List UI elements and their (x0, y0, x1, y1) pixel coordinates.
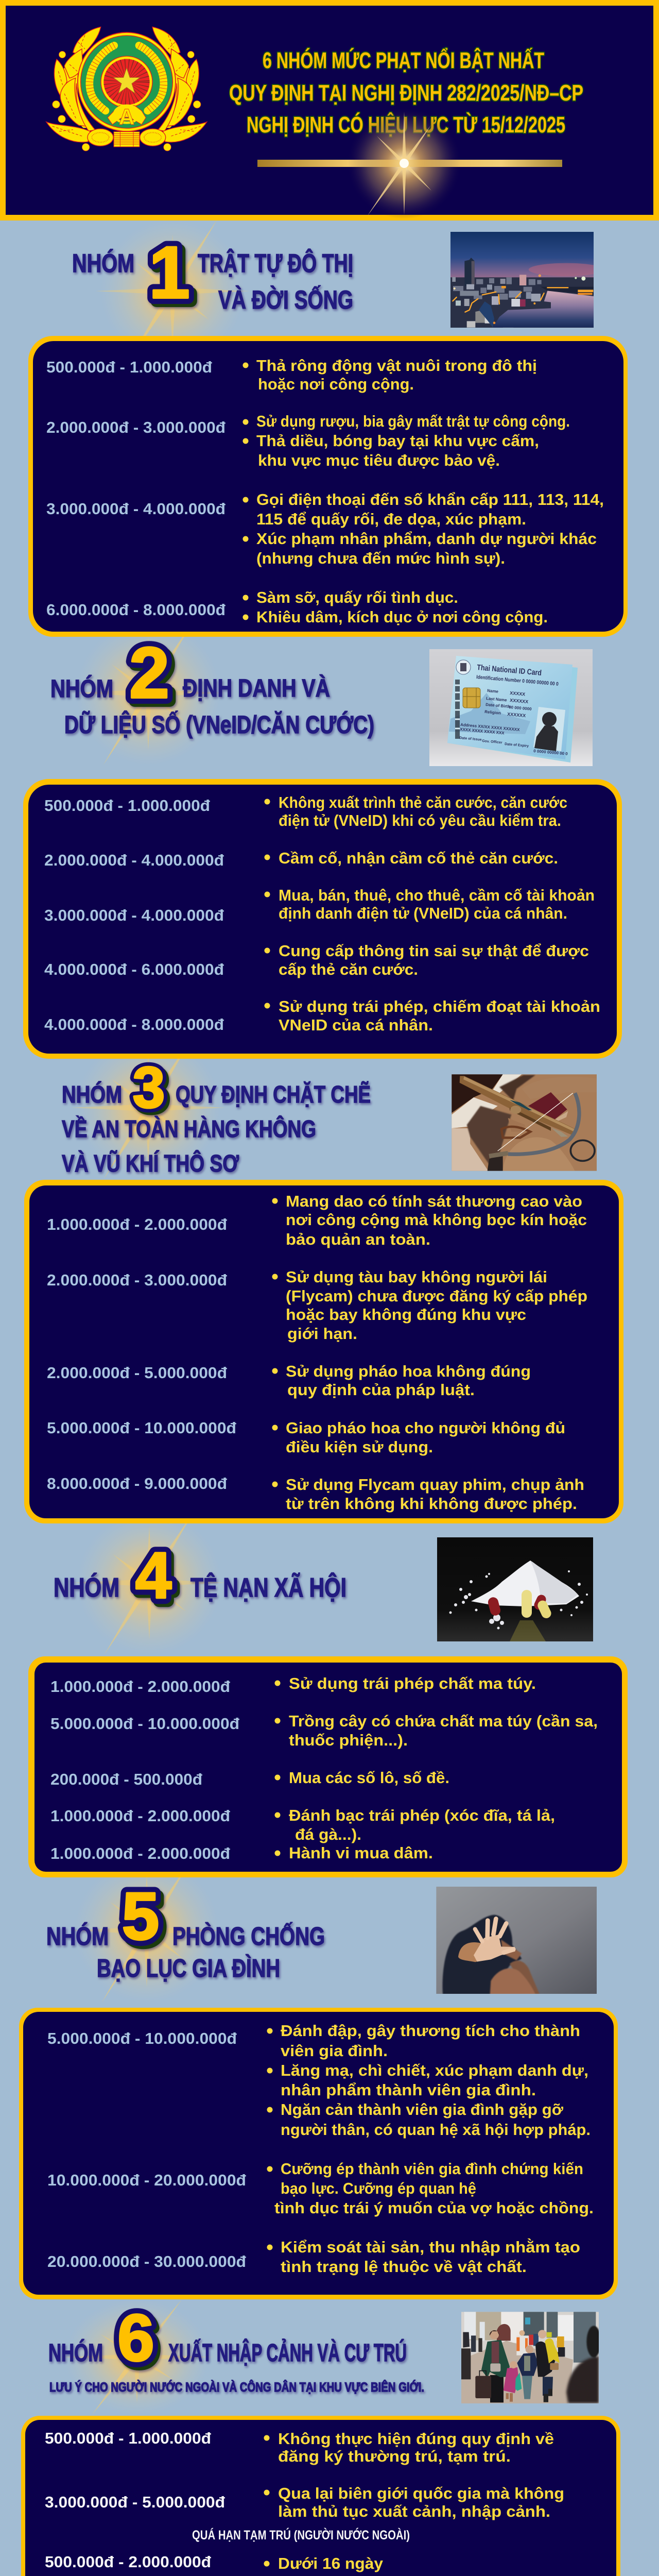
number 5: 5 (122, 1878, 159, 1954)
row: 500.000đ - 2.000.000đ (45, 2553, 384, 2572)
row: 2.000.000đ - 5.000.000đ: Sử dụng pháo hoa không đúng (286, 1362, 531, 1380)
panel frame (28, 336, 628, 637)
row: 500.000đ - 1.000.000đ: đăng ký thường trú, tạm trú. (278, 2447, 511, 2465)
row: 5.000.000đ - 10.000.000đ: Ngăn cản thành viên gia đình gặp gỡ (281, 2100, 564, 2119)
row: 2.000.000đ - 3.000.000đ: 2.000.000đ - 3.000.000đ (47, 1271, 227, 1289)
row: 500.000đ - 2.000.000đ: Dưới 16 ngày (278, 2554, 384, 2572)
section 6 heading: LƯU Ý CHO NGƯỜI NƯỚC NGOÀI VÀ CÔNG DÂN TẠI KHU VỰC BIÊN GIỚI. (49, 2379, 424, 2395)
row: 6.000.000đ - 8.000.000đ: Sàm sỡ, quấy rối tình dục. (256, 588, 458, 606)
row: 500.000đ - 1.000.000đ: 500.000đ - 1.000.000đ (44, 796, 210, 815)
row: 500.000đ - 1.000.000đ (46, 357, 537, 393)
panel frame (28, 1656, 628, 1877)
number 2: 2 (129, 632, 169, 713)
row: 6.000.000đ - 8.000.000đ: 6.000.000đ - 8.000.000đ (46, 601, 226, 619)
row: 5.000.000đ - 10.000.000đ: người thân, có quan hệ xã hội hợp pháp. (281, 2121, 591, 2139)
panel: group 1 fines (28, 336, 628, 637)
row: 10.000.000đ - 20.000.000đ: tình dục trái ý muốn của vợ hoặc chồng. (274, 2199, 594, 2217)
row: 3.000.000đ - 4.000.000đ: Xúc phạm nhân phẩm, danh dự người khác (256, 530, 597, 548)
row: 10.000.000đ - 20.000.000đ (47, 2160, 594, 2217)
photo: woman raising hand (436, 1887, 597, 1995)
section 4 heading (54, 1539, 346, 1615)
row: 2.000.000đ - 5.000.000đ (47, 1362, 531, 1399)
row: 4.000.000đ - 6.000.000đ: 4.000.000đ - 6.000.000đ (44, 960, 224, 978)
row: 3.000.000đ - 5.000.000đ: 3.000.000đ - 5.000.000đ (45, 2493, 225, 2511)
section 3 heading: VỀ AN TOÀN HÀNG KHÔNG (62, 1115, 316, 1142)
row: 20.000.000đ - 30.000.000đ (47, 2238, 580, 2276)
number 6: 6 (120, 2304, 157, 2378)
row: 4.000.000đ - 8.000.000đ: Sử dụng trái phép, chiếm đoạt tài khoản (279, 997, 600, 1015)
row: 500.000đ - 1.000.000đ: 500.000đ - 1.000.000đ (46, 358, 212, 376)
row: 500.000đ - 1.000.000đ: Không thực hiện đúng quy định về (278, 2430, 554, 2448)
panel frame (24, 1180, 623, 1523)
row: 2.000.000đ - 4.000.000đ: Cầm cố, nhận cầm cố thẻ căn cước. (279, 849, 558, 867)
row: 6.000.000đ - 8.000.000đ (46, 588, 548, 626)
number 1: 1 (149, 232, 190, 314)
row: 10.000.000đ - 20.000.000đ: 10.000.000đ - 20.000.000đ (47, 2171, 246, 2189)
panel: group 6 fines (21, 2416, 620, 2576)
subheading: overstay: QUÁ HẠN TẠM TRÚ (NGƯỜI NƯỚC NGOÀI) (192, 2527, 410, 2543)
row: 1.000.000đ - 2.000.000đ gambling: đá gà...). (295, 1825, 361, 1843)
section 1 heading (72, 232, 353, 317)
number 6: 6 (117, 2301, 154, 2375)
photo: national ID card: Gov. Officer (482, 739, 502, 744)
row: 3.000.000đ - 4.000.000đ: Gọi điện thoại đến số khẩn cấp 111, 113, 114, (256, 490, 604, 509)
row: 5.000.000đ - 10.000.000đ: 5.000.000đ - 10.000.000đ (50, 1715, 239, 1733)
section 5 heading: NHÓM (46, 1922, 109, 1951)
title: 6 NHÓM MỨC PHẠT NỔI BẬT NHẤT (263, 47, 544, 73)
row: 3.000.000đ - 5.000.000đ (45, 2484, 564, 2520)
section 6 heading: XUẤT NHẬP CẢNH VÀ CƯ TRÚ (168, 2338, 407, 2367)
row: 3.000.000đ - 4.000.000đ: Mua, bán, thuê, cho thuê, cầm cố tài khoản (279, 886, 595, 904)
number 4: 4 (135, 1539, 171, 1612)
row: 5.000.000đ - 10.000.000đ: nhân phẩm thành viên gia đình. (281, 2081, 536, 2099)
photo: national ID card: XXXXXX (507, 711, 526, 718)
row: 1.000.000đ - 2.000.000đ: 1.000.000đ - 2.000.000đ (50, 1677, 230, 1696)
row: 2.000.000đ - 3.000.000đ: Thả diều, bóng bay tại khu vực cấm, (256, 432, 539, 450)
row: 2.000.000đ - 5.000.000đ: 2.000.000đ - 5.000.000đ (47, 1364, 227, 1382)
section 2 heading (50, 632, 374, 739)
number 1: 1 (152, 235, 193, 317)
panel frame (23, 779, 622, 1059)
photo: city at night (450, 232, 604, 328)
photo: national ID card: 00 000 0000 (509, 705, 532, 711)
section 5 heading: PHÒNG CHỐNG (172, 1922, 325, 1951)
row: 8.000.000đ - 9.000.000đ: Sử dụng Flycam quay phim, chụp ảnh (286, 1476, 584, 1494)
row: 1.000.000đ - 2.000.000đ: nơi công cộng mà không bọc kín hoặc (286, 1211, 587, 1229)
photo: national ID card: Address XX/XX XXXX XXXXXX (460, 722, 520, 732)
row: 5.000.000đ - 10.000.000đ: Giao pháo hoa cho người không đủ (286, 1419, 565, 1437)
photo: national ID card: Religion (484, 709, 501, 716)
panel frame (19, 2008, 618, 2299)
row: 2.000.000đ - 3.000.000đ (46, 412, 570, 469)
section 1 heading: VÀ ĐỜI SỐNG (218, 285, 353, 314)
number 5: 5 (122, 1878, 159, 1954)
row: 3.000.000đ - 5.000.000đ: làm thủ tục xuất cảnh, nhập cảnh. (278, 2502, 550, 2520)
row: 1.000.000đ - 2.000.000đ: bảo quản an toàn. (286, 1230, 430, 1248)
row: 5.000.000đ - 10.000.000đ: 5.000.000đ - 10.000.000đ (47, 1419, 236, 1437)
section 3 heading: VÀ VŨ KHÍ THÔ SƠ (62, 1150, 239, 1177)
row: 2.000.000đ - 3.000.000đ: (Flycam) chưa được đăng ký cấp phép (286, 1287, 587, 1305)
section 2 heading: NHÓM (50, 674, 113, 703)
row: 4.000.000đ - 8.000.000đ: 4.000.000đ - 8.000.000đ (44, 1015, 224, 1033)
row: 4.000.000đ - 8.000.000đ (44, 997, 600, 1034)
row: 500.000đ - 2.000.000đ: 500.000đ - 2.000.000đ (45, 2553, 211, 2571)
icon: police emblem (46, 27, 207, 151)
section 4 heading: NHÓM (54, 1573, 119, 1603)
section 6 heading: NHÓM (48, 2338, 103, 2367)
row: 2.000.000đ - 3.000.000đ: giới hạn. (287, 1325, 357, 1343)
row: 500.000đ - 1.000.000đ (45, 2429, 554, 2465)
row: 1.000.000đ - 2.000.000đ prostitution: Hành vi mua dâm. (289, 1844, 433, 1862)
row: 5.000.000đ - 10.000.000đ (47, 2022, 591, 2139)
row: 500.000đ - 1.000.000đ (44, 793, 567, 829)
row: 2.000.000đ - 3.000.000đ: 2.000.000đ - 3.000.000đ (46, 418, 226, 436)
photo: national ID card: Date of Expiry (505, 742, 529, 748)
row: 200.000đ - 500.000đ: Mua các số lô, số đề. (289, 1769, 449, 1787)
section 3 heading: QUY ĐỊNH CHẶT CHẼ (176, 1081, 371, 1108)
row: 2.000.000đ - 4.000.000đ: 2.000.000đ - 4.000.000đ (44, 851, 224, 869)
row: 5.000.000đ - 10.000.000đ: Đánh đập, gây thương tích cho thành (281, 2022, 580, 2040)
number 6: 6 (117, 2301, 154, 2375)
panel: group 3 fines (24, 1180, 623, 1523)
row: 1.000.000đ - 2.000.000đ prostitution: 1.000.000đ - 2.000.000đ (50, 1844, 230, 1862)
row: 5.000.000đ - 10.000.000đ (50, 1712, 598, 1749)
header frame (0, 0, 659, 221)
row: 1.000.000đ - 2.000.000đ (47, 1192, 587, 1248)
row: 5.000.000đ - 10.000.000đ (47, 1419, 565, 1456)
row: 5.000.000đ - 10.000.000đ: thuốc phiện...). (289, 1731, 408, 1749)
row: 3.000.000đ - 5.000.000đ: Qua lại biên giới quốc gia mà không (278, 2484, 564, 2502)
photo: national ID card: 0 0000 00000 00 0 (533, 749, 568, 756)
photo: national ID card: XXXXXX (510, 698, 529, 704)
row: 5.000.000đ - 10.000.000đ: Trồng cây có chứa chất ma túy (cần sa, (289, 1712, 598, 1730)
number 3: 3 (133, 1055, 165, 1120)
row: 3.000.000đ - 4.000.000đ: 115 để quấy rối, đe dọa, xúc phạm. (256, 510, 526, 528)
row: 2.000.000đ - 3.000.000đ (47, 1268, 587, 1343)
row: 500.000đ - 1.000.000đ: 500.000đ - 1.000.000đ (45, 2429, 211, 2447)
row: 4.000.000đ - 6.000.000đ: cấp thẻ căn cước. (279, 960, 418, 978)
row: 20.000.000đ - 30.000.000đ: Kiểm soát tài sản, thu nhập nhằm tạo (281, 2238, 580, 2256)
section 1 heading: TRẬT TỰ ĐÔ THỊ (198, 248, 353, 278)
photo: national ID card: Date of Issue (459, 736, 482, 742)
row: 1.000.000đ - 2.000.000đ (50, 1674, 536, 1696)
row: 2.000.000đ - 3.000.000đ: khu vực mục tiêu được bảo vệ. (258, 451, 500, 469)
section 4 heading: TỆ NẠN XÃ HỘI (190, 1572, 346, 1603)
panel frame (21, 2416, 620, 2576)
row: 3.000.000đ - 4.000.000đ (44, 886, 595, 924)
row: 1.000.000đ - 2.000.000đ gambling: Đánh bạc trái phép (xóc đĩa, tá lả, (289, 1806, 555, 1824)
row: 5.000.000đ - 10.000.000đ: viên gia đình. (281, 2042, 388, 2060)
photo: national ID card: Last Name (486, 696, 507, 703)
row: 200.000đ - 500.000đ: 200.000đ - 500.000đ (50, 1770, 202, 1788)
photo: drug powder and capsules (437, 1537, 593, 1641)
row: 8.000.000đ - 9.000.000đ (47, 1475, 584, 1513)
section 3 heading: NHÓM (62, 1081, 122, 1108)
row: 500.000đ - 1.000.000đ: điện tử (VNeID) khi có yêu cầu kiểm tra. (279, 811, 561, 829)
row: 500.000đ - 1.000.000đ: Không xuất trình thẻ căn cước, căn cước (279, 793, 567, 811)
row: 1.000.000đ - 2.000.000đ: 1.000.000đ - 2.000.000đ (47, 1215, 227, 1233)
row: 1.000.000đ - 2.000.000đ prostitution (50, 1844, 433, 1862)
section 5 heading: BẠO LỤC GIA ĐÌNH (97, 1955, 280, 1982)
row: 1.000.000đ - 2.000.000đ gambling: 1.000.000đ - 2.000.000đ (50, 1807, 230, 1825)
row: 500.000đ - 1.000.000đ: Thả rông động vật nuôi trong đô thị (256, 357, 537, 375)
row: 8.000.000đ - 9.000.000đ: từ trên không khi không được phép. (286, 1495, 577, 1513)
row: 20.000.000đ - 30.000.000đ: 20.000.000đ - 30.000.000đ (47, 2252, 246, 2270)
row: 2.000.000đ - 3.000.000đ: Sử dụng rượu, bia gây mất trật tự công cộng. (256, 412, 570, 430)
row: 1.000.000đ - 2.000.000đ: Sử dụng trái phép chất ma túy. (289, 1674, 536, 1692)
photo: national ID card: Identification Number 0 0000 00000 00 0 (476, 674, 559, 687)
section 5 heading (46, 1878, 325, 1982)
row: 4.000.000đ - 6.000.000đ: Cung cấp thông tin sai sự thật để được (279, 942, 589, 960)
number 3: 3 (133, 1055, 165, 1120)
number 2: 2 (132, 635, 172, 716)
photo: family at border station (461, 2312, 601, 2403)
row: 3.000.000đ - 4.000.000đ: (nhưng chưa đến mức hình sự). (256, 549, 505, 567)
row: 500.000đ - 1.000.000đ: hoặc nơi công cộng. (258, 375, 414, 393)
section 6 heading (48, 2301, 424, 2395)
number 2: 2 (129, 632, 169, 713)
row: 3.000.000đ - 4.000.000đ (46, 490, 604, 567)
section 3 heading (62, 1055, 371, 1177)
row: 5.000.000đ - 10.000.000đ: Lăng mạ, chì chiết, xúc phạm danh dự, (281, 2061, 588, 2079)
row: 1.000.000đ - 2.000.000đ gambling (50, 1806, 555, 1843)
row: 2.000.000đ - 4.000.000đ (44, 849, 558, 869)
section 1 heading: NHÓM (72, 249, 134, 278)
row: 10.000.000đ - 20.000.000đ: bạo lực. Cưỡng ép quan hệ (281, 2179, 476, 2197)
row: 6.000.000đ - 8.000.000đ: Khiêu dâm, kích dục ở nơi công cộng. (256, 608, 548, 626)
row: 5.000.000đ - 10.000.000đ: 5.000.000đ - 10.000.000đ (47, 2029, 237, 2047)
row: 20.000.000đ - 30.000.000đ: tình trạng lệ thuộc về vật chất. (281, 2258, 527, 2276)
section 2 heading: DỮ LIỆU SỐ (VNeID/CĂN CƯỚC) (64, 710, 374, 739)
photo: national ID card (429, 649, 593, 766)
row: 10.000.000đ - 20.000.000đ: Cưỡng ép thành viên gia đình chứng kiến (281, 2160, 583, 2178)
photo: national ID card: Thai National ID Card (477, 663, 542, 677)
row: 5.000.000đ - 10.000.000đ: điều kiện sử dụng. (286, 1438, 433, 1456)
section 2 heading: ĐỊNH DANH VÀ (183, 674, 330, 702)
row: 2.000.000đ - 3.000.000đ: hoặc bay không đúng khu vực (286, 1306, 526, 1324)
photo: crossbow on fur (452, 1074, 597, 1171)
row: 4.000.000đ - 6.000.000đ (44, 942, 589, 978)
photo: national ID card: Date of Birth (485, 702, 511, 709)
row: 1.000.000đ - 2.000.000đ: Mang dao có tính sát thương cao vào (286, 1192, 582, 1210)
row: 200.000đ - 500.000đ (50, 1769, 449, 1788)
photo: national ID card: XXXXX (510, 690, 526, 697)
row: 3.000.000đ - 4.000.000đ: 3.000.000đ - 4.000.000đ (46, 500, 226, 518)
gold divider with starburst (257, 108, 562, 219)
number 1: 1 (149, 232, 190, 314)
photo: national ID card: XXXX XXXX XXXX XXX (460, 727, 505, 736)
icon: police emblem: A (118, 105, 135, 130)
panel: group 5 fines (19, 2008, 618, 2299)
row: 3.000.000đ - 4.000.000đ: định danh điện tử (VNeID) của cá nhân. (279, 904, 567, 922)
panel: group 4 fines (28, 1656, 628, 1877)
number 5: 5 (125, 1882, 162, 1957)
title (229, 47, 583, 138)
number 4: 4 (138, 1542, 174, 1615)
row: 4.000.000đ - 8.000.000đ: VNeID của cá nhân. (279, 1016, 433, 1034)
row: 2.000.000đ - 3.000.000đ: Sử dụng tàu bay không người lái (286, 1268, 547, 1286)
number 4: 4 (135, 1539, 171, 1612)
number 3: 3 (135, 1058, 167, 1122)
panel: group 2 fines (23, 779, 622, 1059)
row: 2.000.000đ - 5.000.000đ: quy định của pháp luật. (287, 1381, 475, 1399)
header banner (0, 0, 659, 221)
section number glows (60, 217, 250, 2416)
row: 3.000.000đ - 4.000.000đ: 3.000.000đ - 4.000.000đ (44, 906, 224, 924)
photo: national ID card: Name (487, 688, 499, 694)
row: 8.000.000đ - 9.000.000đ: 8.000.000đ - 9.000.000đ (47, 1475, 227, 1493)
